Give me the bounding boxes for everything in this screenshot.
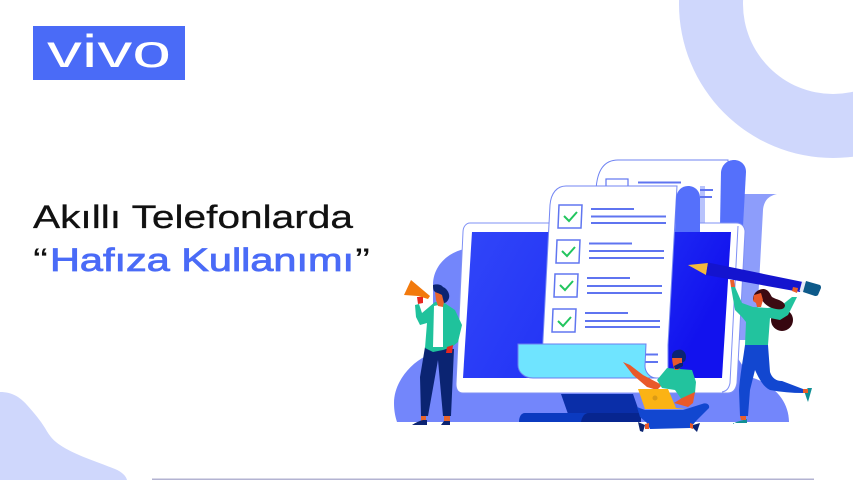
checklist row 4: [552, 309, 660, 332]
woman holding pencil: [731, 287, 812, 424]
pencil: [688, 262, 821, 296]
logo: vivo: vivo: [47, 25, 171, 77]
hair: [672, 350, 686, 363]
title: “: [33, 242, 48, 278]
monitor stand: [519, 394, 641, 422]
raised arm: [623, 362, 662, 390]
face: [672, 355, 682, 370]
beard: [674, 363, 683, 369]
hair: [753, 289, 785, 309]
title: Hafıza Kullanımı: [50, 242, 354, 278]
front checklist paper: [541, 186, 700, 378]
face: [435, 292, 444, 307]
raised hand: [417, 297, 423, 304]
pants: [420, 347, 454, 416]
checklist row 3: [554, 274, 662, 297]
shoes: [733, 388, 812, 424]
hair bun: [771, 309, 793, 331]
jacket: [415, 302, 462, 352]
background blob: [394, 249, 789, 422]
back paper roll: [596, 160, 777, 340]
illustration: checklist on monitor with people: [394, 160, 821, 432]
shoes: [412, 420, 450, 425]
laptop: [638, 389, 686, 409]
shirt: [657, 368, 696, 400]
jeans: [739, 345, 803, 416]
hair: [433, 284, 449, 303]
forearm: [674, 392, 695, 407]
man with megaphone: [404, 280, 462, 425]
checklist row 1: [558, 205, 666, 228]
top: [731, 287, 797, 345]
ankles: [421, 416, 450, 421]
legs: [637, 403, 709, 429]
logo: vivo: [33, 25, 185, 80]
decorative blob: bottom left: [0, 392, 127, 480]
cyan paper scroll end: [518, 344, 656, 378]
decorative ring: top right: [679, 0, 853, 158]
footer rule: [152, 478, 814, 480]
title: ”: [355, 242, 370, 278]
seated man with laptop: [623, 350, 709, 432]
monitor: [456, 223, 745, 393]
megaphone: [404, 280, 430, 299]
title: [33, 199, 370, 278]
feet: [638, 422, 700, 432]
pocket hand: [446, 345, 453, 353]
checklist row 2: [556, 240, 664, 263]
title: Akıllı Telefonlarda: [33, 199, 353, 235]
shirt: [433, 304, 443, 347]
face: [753, 293, 763, 307]
